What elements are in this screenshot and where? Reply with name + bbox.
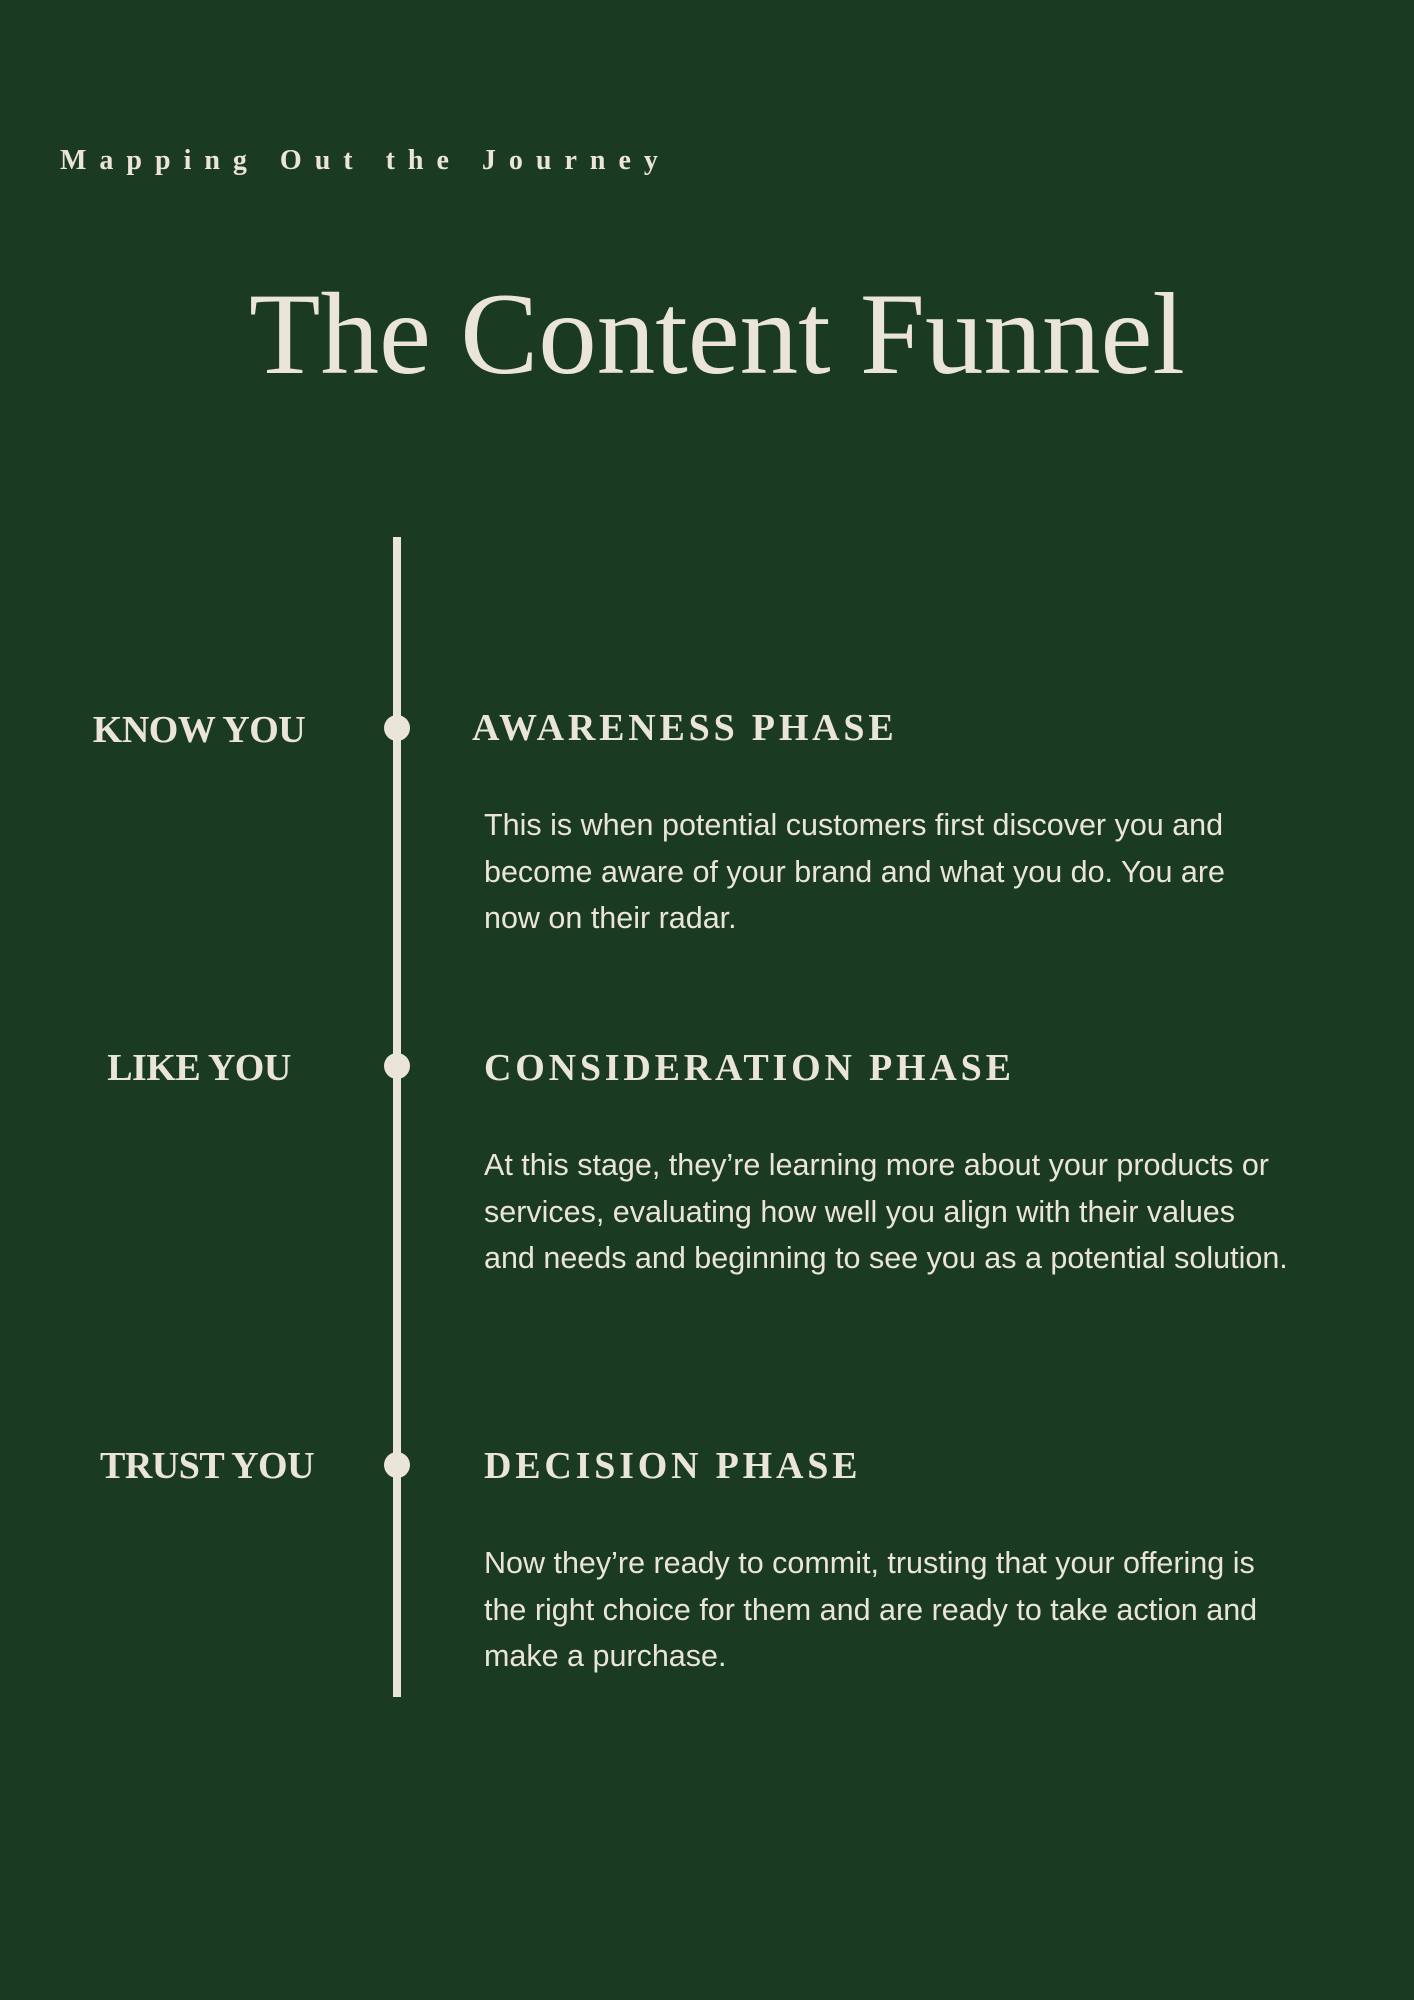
panel: awareness [472,707,1225,935]
text: awareness: now on their radar. [484,901,737,935]
dot: like [384,1053,410,1079]
heading: consideration: CONSIDERATION PHASE [484,1047,1015,1089]
text: consideration: and needs and beginning to see you as a potential solution. [484,1241,1288,1275]
heading: awareness: AWARENESS PHASE [472,707,898,749]
panel: decision [484,1445,1257,1673]
subtitle: Mapping Out the Journey [60,145,671,176]
text: consideration [484,1148,1288,1275]
dot: know [384,715,410,741]
text: decision [484,1546,1257,1673]
heading: decision: DECISION PHASE [484,1445,861,1487]
text: decision: Now they’re ready to commit, trusting that your offering is [484,1546,1255,1580]
dot: trust [384,1452,410,1478]
text: decision: make a purchase. [484,1639,726,1673]
text: awareness: This is when potential customers first discover you and [484,808,1223,842]
text: consideration: At this stage, they’re learning more about your products or [484,1148,1269,1182]
label: know you: KNOW YOU [93,709,305,751]
text: awareness [484,808,1225,935]
panel: consideration [484,1047,1288,1275]
title: The Content Funnel [249,270,1185,399]
text: awareness: become aware of your brand and what you do. You are [484,854,1225,888]
label: trust you: TRUST YOU [100,1445,314,1487]
text: consideration: services, evaluating how well you align with their values [484,1194,1235,1228]
label: like you: LIKE YOU [107,1047,291,1089]
text: decision: the right choice for them and are ready to take action and [484,1592,1257,1626]
timeline line [393,537,401,1697]
